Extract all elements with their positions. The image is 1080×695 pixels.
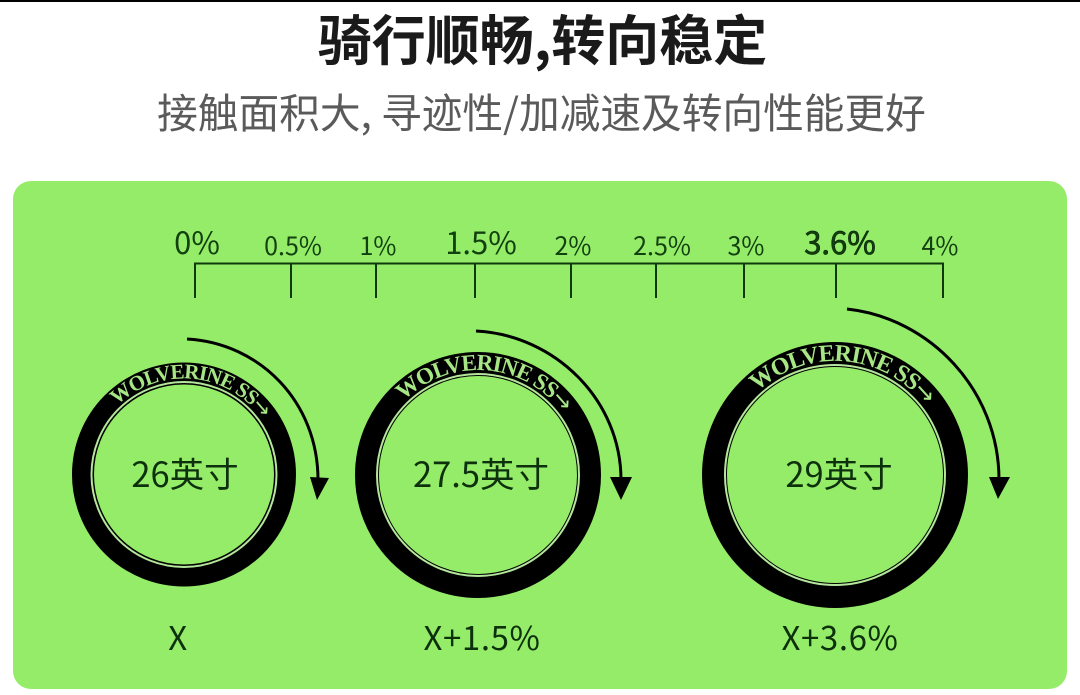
percentage scale <box>174 218 958 298</box>
subtitle: 接触面积大, 寻迹性/加减速及转向性能更好 <box>157 81 926 140</box>
tire: 27.5 inch: WOLVERINE SS→ <box>394 354 569 408</box>
tire: 29 inch <box>702 342 968 608</box>
scale labels: 1% <box>360 227 396 263</box>
scale labels: 2% <box>555 227 591 263</box>
scale labels: 0% <box>174 218 220 263</box>
arrow: 26 inch rotation <box>187 339 329 500</box>
tire: 26 inch: 26英寸 <box>131 447 239 497</box>
scale labels <box>174 218 958 263</box>
arrow: 27.5 inch rotation <box>476 331 632 500</box>
tire: 27.5 inch: 27.5英寸 <box>413 447 549 497</box>
label: X: X <box>168 612 188 660</box>
scale labels: 4% <box>922 227 958 263</box>
scale labels: 1.5% <box>445 218 517 263</box>
tire: 26 inch: WOLVERINE SS→ <box>108 364 268 414</box>
panel: tire comparison <box>13 181 1067 689</box>
tire: 27.5 inch <box>355 352 601 598</box>
label: X+3.6%: X+3.6% <box>781 612 899 660</box>
scale labels: 0.5% <box>264 227 322 263</box>
scale labels: 3.6% <box>804 218 876 263</box>
tire: 26 inch <box>72 362 296 586</box>
arrow: 29 inch rotation <box>847 309 1010 499</box>
tire: 29 inch: 29英寸 <box>785 447 893 497</box>
scale labels: 2.5% <box>633 227 691 263</box>
scale labels: 3% <box>728 227 764 263</box>
label: X+1.5%: X+1.5% <box>423 612 541 660</box>
tire: 29 inch: WOLVERINE SS→ <box>748 345 932 400</box>
scale ruler <box>195 263 943 298</box>
